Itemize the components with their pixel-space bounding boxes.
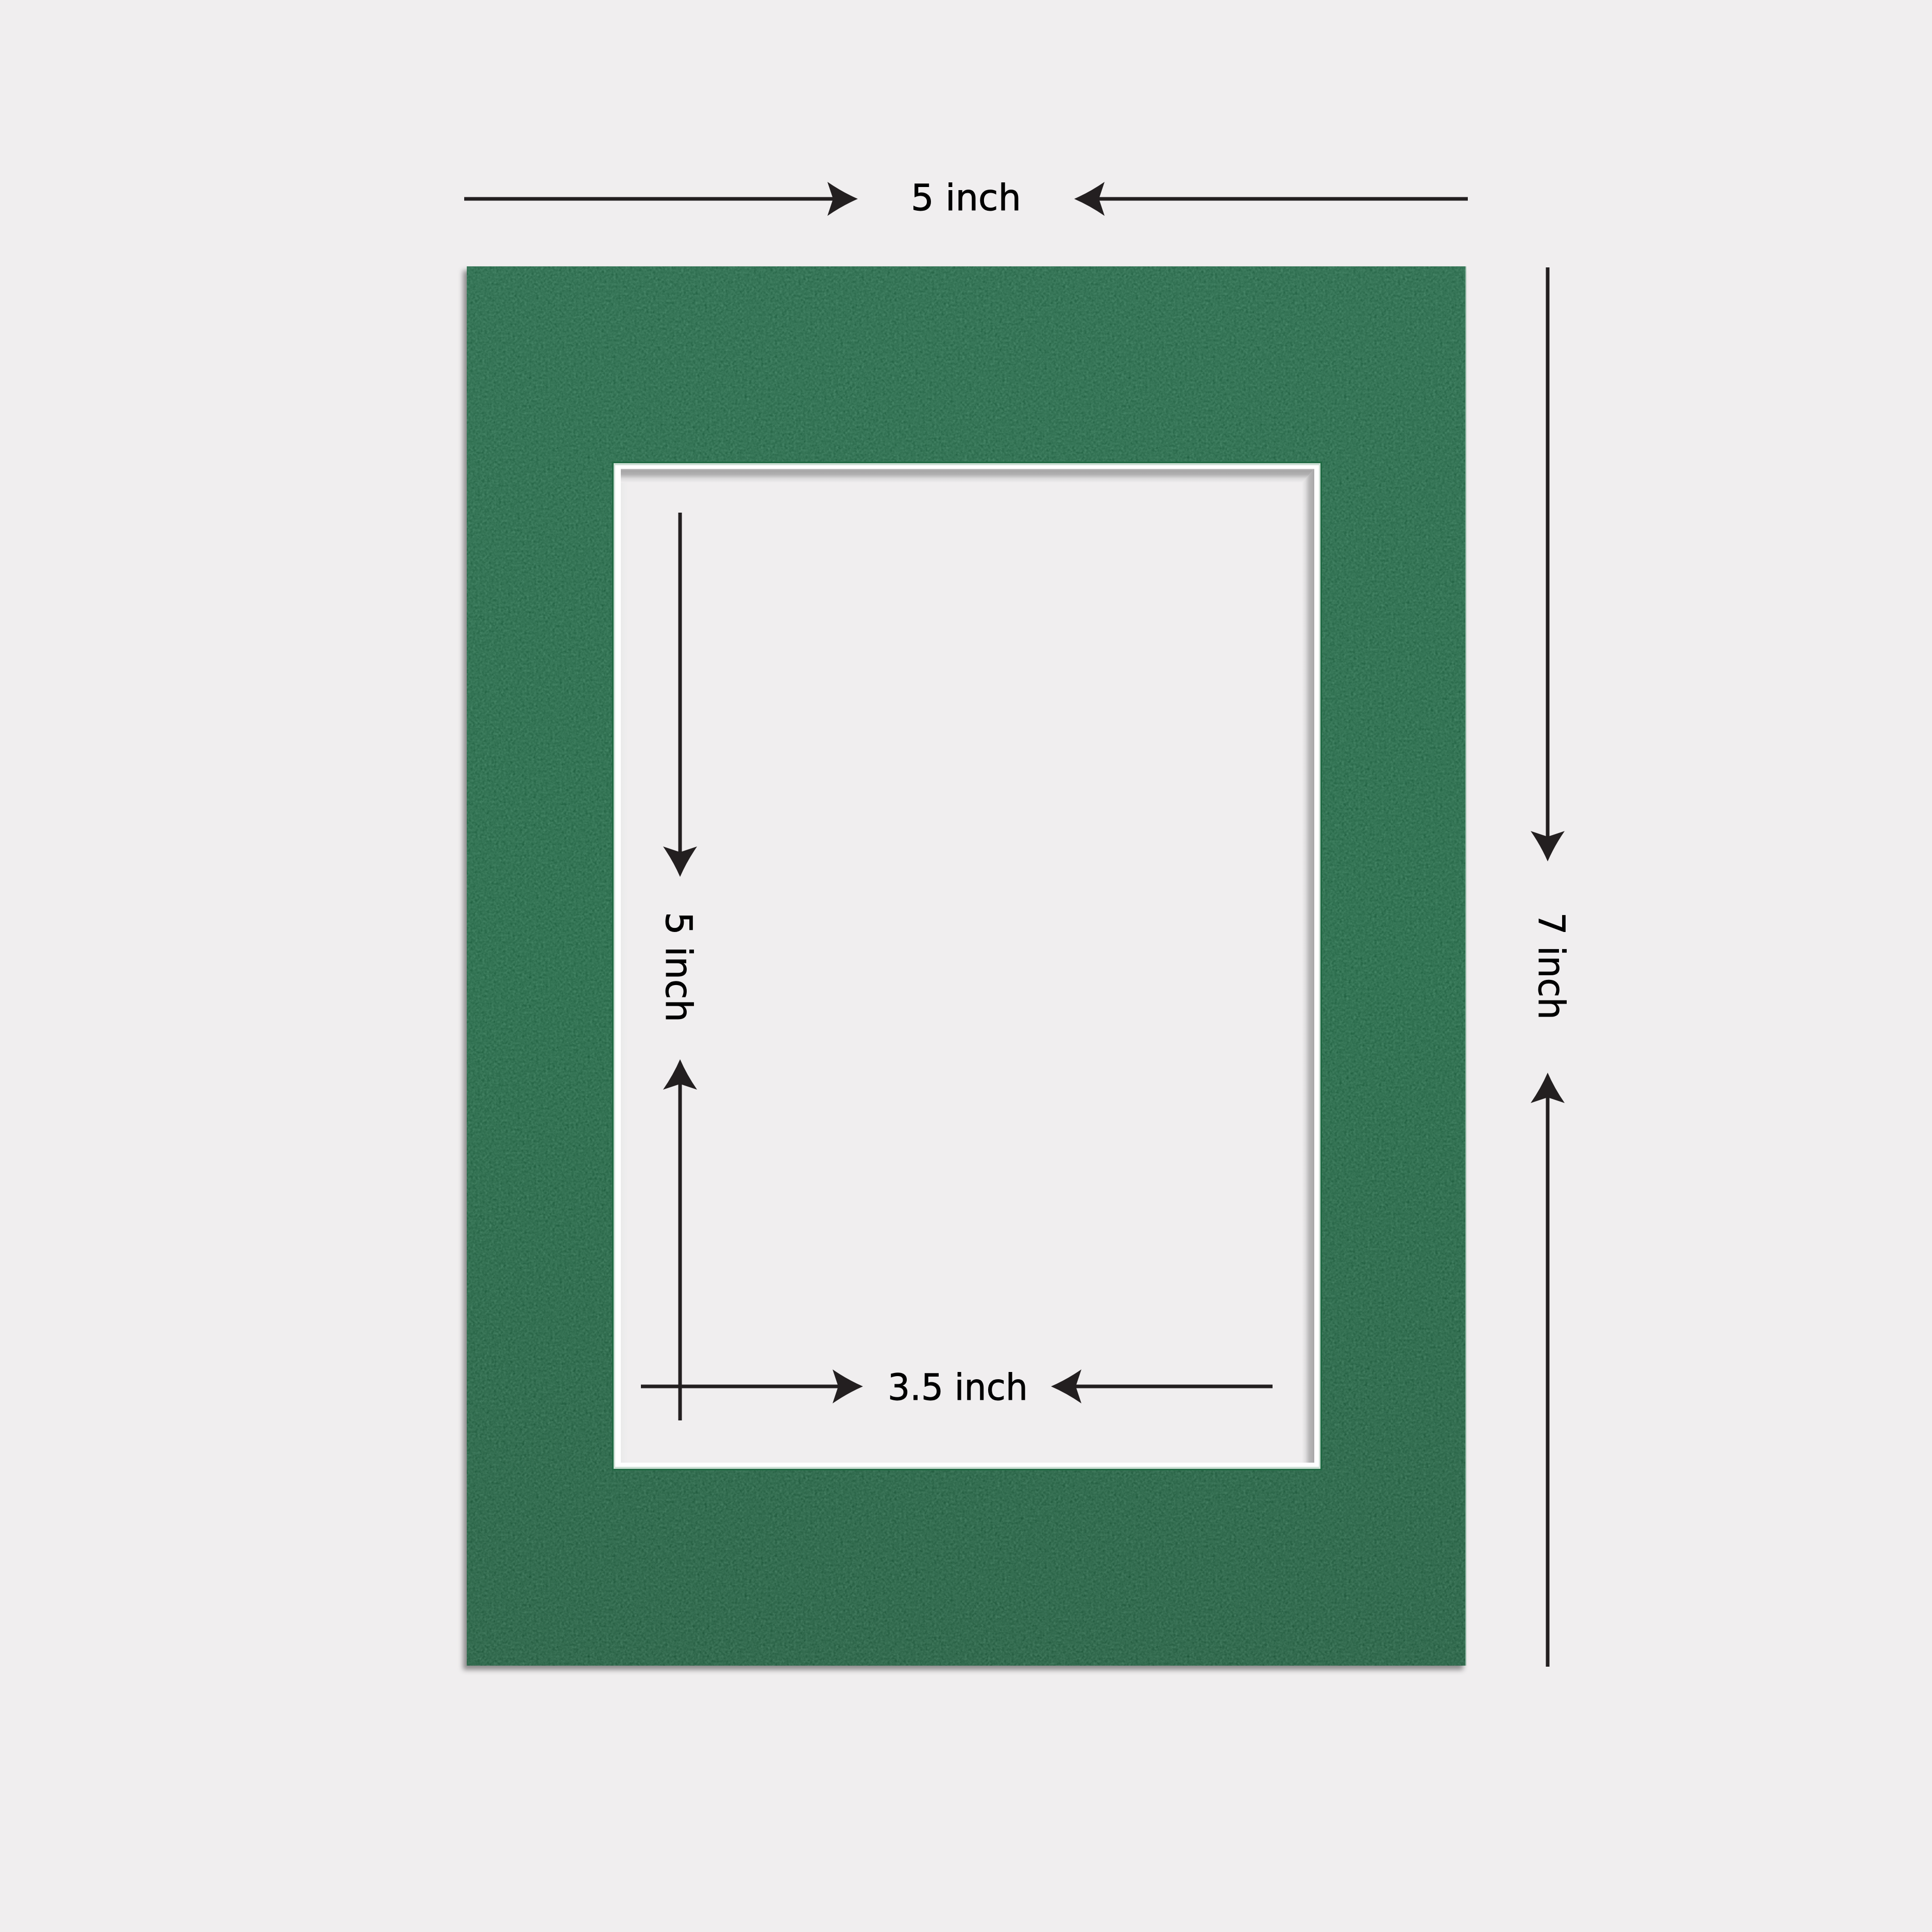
window height arrow pointing up <box>663 1059 697 1420</box>
mat drop shadow <box>463 270 1463 1670</box>
window width arrow pointing right <box>641 1369 863 1403</box>
window width arrow pointing left <box>1051 1369 1273 1403</box>
panel: green photo mat <box>463 266 1466 1670</box>
right height arrow pointing up <box>1531 1073 1565 1667</box>
top width arrow pointing right <box>464 182 858 216</box>
right height label: 7 inch <box>1530 912 1572 1020</box>
window height arrow pointing down <box>663 513 697 877</box>
window height label: 5 inch <box>657 912 700 1022</box>
mat right edge highlight <box>1465 266 1466 1666</box>
mat board <box>467 266 1466 1666</box>
mat window opening <box>612 462 1322 1470</box>
right height arrow pointing down <box>1531 267 1565 861</box>
top width label: 5 inch <box>911 177 1021 219</box>
window width label: 3.5 inch <box>888 1366 1028 1409</box>
top width arrow pointing left <box>1074 182 1468 216</box>
